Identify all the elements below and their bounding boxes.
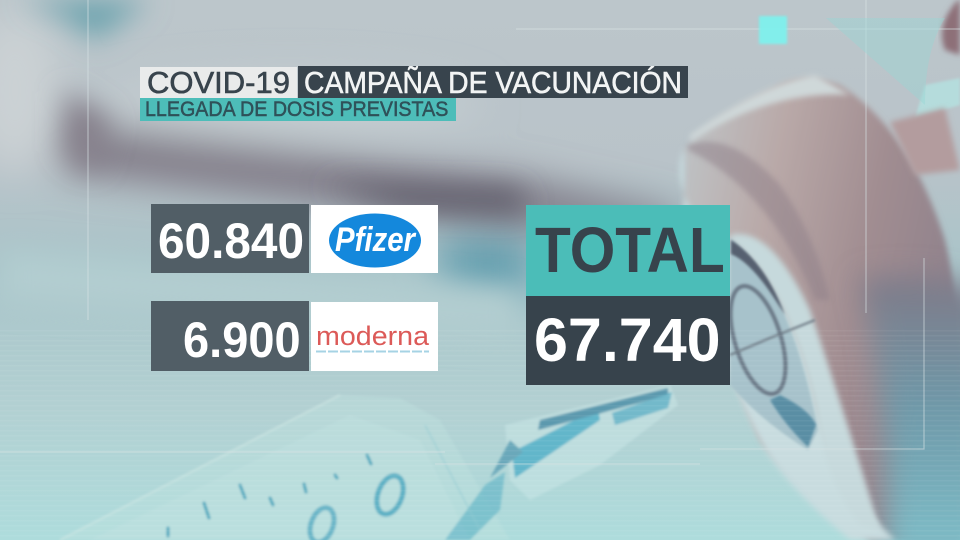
row: Moderna doses xyxy=(151,301,438,371)
logo: Moderna xyxy=(311,302,438,371)
number: 6.900: 6.900 xyxy=(183,312,301,368)
total panel xyxy=(526,205,730,385)
total value xyxy=(526,296,730,385)
vial stopper xyxy=(730,238,818,450)
title block xyxy=(140,66,688,121)
syringe barrel, bottom xyxy=(60,385,678,540)
number: 6.900 xyxy=(151,301,309,371)
vial neck, top right xyxy=(942,0,960,55)
blurred syringe, upper left xyxy=(0,10,680,300)
logo: Pfizer xyxy=(311,205,438,273)
teal triangle accent xyxy=(826,18,945,105)
total value: 67.740 xyxy=(534,306,721,374)
vial xyxy=(680,0,960,540)
subtitle tag: LLEGADA DE DOSIS PREVISTAS xyxy=(145,98,448,121)
needle xyxy=(730,320,815,355)
logo: Moderna: moderna xyxy=(316,321,430,351)
total label: TOTAL xyxy=(535,214,725,286)
logo: Pfizer: Pfizer xyxy=(335,221,417,259)
row: Pfizer doses xyxy=(151,204,438,273)
number: 60.840: 60.840 xyxy=(158,213,304,269)
cyan square accent xyxy=(759,16,787,44)
